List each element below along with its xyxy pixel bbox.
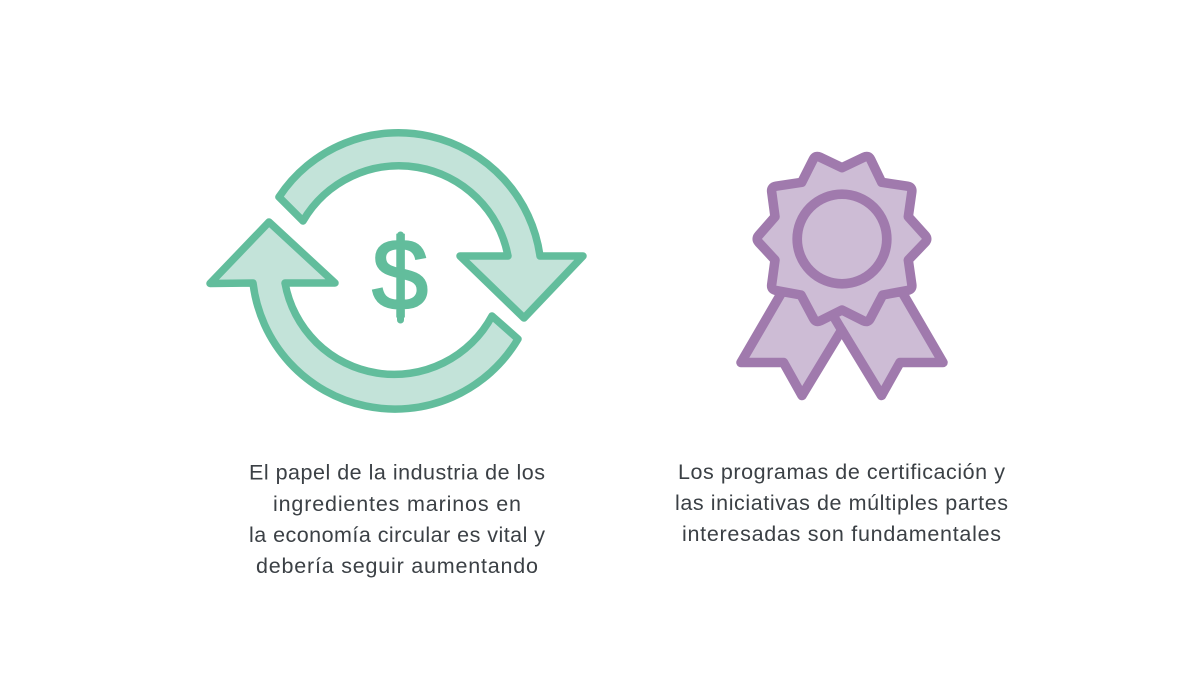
rosette seal bbox=[757, 156, 927, 322]
rosette inner circle bbox=[797, 194, 887, 284]
text block: circular economy bbox=[249, 460, 545, 578]
text block: certification programmes: interesadas son fundamentales bbox=[682, 522, 1001, 546]
icon: circular arrows with dollar sign bbox=[210, 133, 583, 409]
icon: award rosette with ribbons bbox=[741, 156, 943, 396]
text block: certification programmes: Los programas de certificación y bbox=[678, 460, 1005, 484]
text block: certification programmes bbox=[675, 460, 1008, 546]
bottom circular arrow bbox=[210, 222, 518, 409]
text block: circular economy: la economía circular es vital y bbox=[249, 523, 545, 547]
dollar sign: $ bbox=[372, 219, 428, 331]
top circular arrow bbox=[279, 133, 583, 318]
text block: certification programmes: las iniciativas de múltiples partes bbox=[675, 491, 1008, 515]
ribbon fold line bbox=[831, 312, 842, 330]
text block: circular economy: El papel de la industria de los bbox=[249, 460, 545, 484]
ribbon tails bbox=[741, 292, 943, 396]
text block: circular economy: ingredientes marinos en bbox=[273, 492, 521, 516]
text block: circular economy: debería seguir aumentando bbox=[256, 554, 538, 578]
